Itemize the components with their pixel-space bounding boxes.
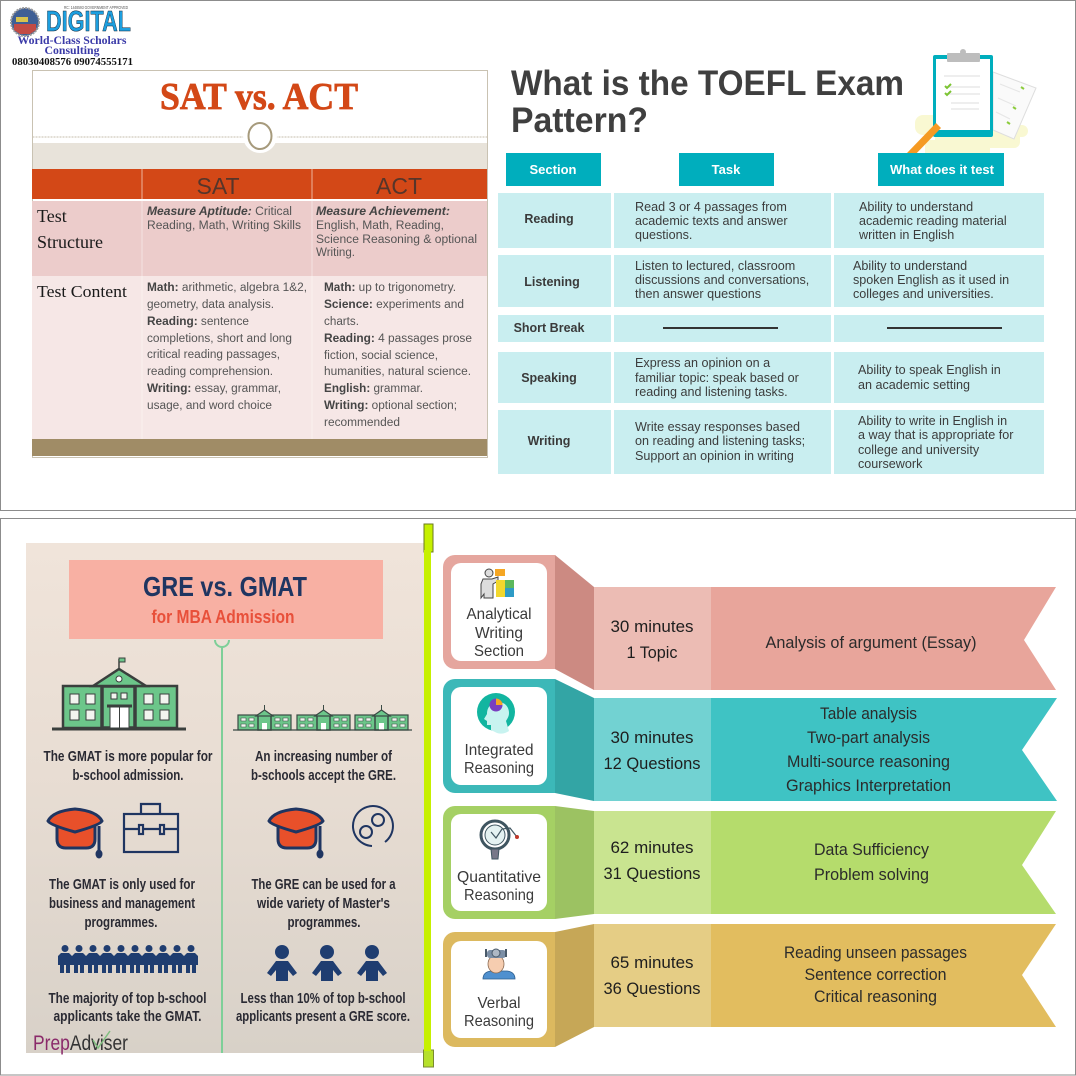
row: Writing: coursework [858,457,923,471]
duration: 62 minutes [610,838,694,857]
text: GRE applicants [236,990,410,1025]
duration [610,617,694,662]
icon: three people [267,945,387,981]
ribbon text: Graphics Interpretation [786,776,951,795]
row: Listening [498,255,1044,307]
row: Listening: then answer questions [635,287,761,301]
panel: GRE vs GMAT [26,543,424,1055]
icon: briefcase [124,804,178,852]
ribbon text: Table analysis [820,704,917,723]
row: Reading: questions. [635,228,692,242]
row: Speaking: an academic setting [858,378,970,392]
ribbon text [814,840,929,884]
icon: infinity circle [353,806,393,846]
row: test structure: Measure Aptitude: Critical [147,206,292,218]
text: GMAT popularity: The GMAT is more popular for [44,748,213,765]
logo: PrepAdviser: PrepAdviser [33,1032,128,1055]
row: Short Break: Short Break [514,321,584,335]
duration: 1 Topic [626,643,678,662]
row: test content: English: grammar. [324,383,423,395]
row: Speaking: Ability to speak English in [858,363,1001,377]
beige band [33,143,487,169]
card label: Verbal [478,995,520,1012]
row: Listening: discussions and conversations, [635,273,809,287]
row: Reading: Read 3 or 4 passages from [635,200,787,214]
row: Writing: on reading and listening tasks; [635,434,805,448]
row: test content: critical reading passages, [147,349,280,361]
ribbon text [784,943,967,1006]
duration: 65 minutes [610,953,694,972]
frame: bottom panel [0,518,1076,1075]
icon: person with puzzle [481,569,514,598]
icon: magnifier with chart [481,821,519,859]
logo: Digital World-Class Scholars Consulting: World-Class Scholars [18,33,127,47]
row: Listening: Listening [524,275,580,289]
duration [604,838,700,883]
text: GRE applicants: Less than 10% of top b-school [240,990,406,1007]
panel: Integrated Reasoning [443,679,1057,801]
heading box: GRE vs. GMAT [143,571,307,602]
card label: Quantitative [457,869,541,886]
icon: large school [52,658,186,729]
row: Listening: Ability to understand [853,259,967,273]
table header row: ACT [376,173,422,199]
ribbon text: Critical reasoning [814,987,937,1006]
icon: graduation cap left [48,809,102,858]
row: Speaking: familiar topic: speak based or [635,371,799,385]
card label [466,606,532,660]
row: test structure: Science Reasoning & optional [316,234,477,246]
ribbon text: Sentence correction [804,965,946,984]
text: GRE use [252,876,396,931]
icon: ten people [58,945,198,973]
text: GRE popularity: An increasing number of [255,748,393,765]
duration: 30 minutes [610,728,694,747]
row: test content: usage, and word choice [147,400,272,412]
text: GMAT use: business and management [49,895,195,912]
ribbon text [786,704,951,795]
text: GRE popularity: b-schools accept the GRE. [251,767,396,784]
row: test structure: Reading, Math, Writing Skills [147,220,301,232]
card label [457,869,541,904]
footer bar [32,439,487,456]
row: test content: Reading: sentence [147,316,249,328]
icon: graduation cap right [269,809,324,858]
logo: Digital World-Class Scholars Consulting: RC: 1448593 GOVERNMENT APPROVED [64,5,129,10]
text: GRE applicants: applicants present a GRE score. [236,1008,410,1025]
text: GMAT popularity [44,748,213,784]
text: GRE use: programmes. [288,914,360,931]
row: Speaking [498,352,1044,403]
row: test content: Math: up to trigonometry. [324,282,456,294]
title: What is the TOEFL Exam Pattern? [511,64,904,140]
row: test content: recommended [324,417,400,429]
row: Listening: colleges and universities. [853,287,994,301]
text: GMAT use: programmes. [84,914,158,931]
text: GMAT use: The GMAT is only used for [49,876,195,893]
row: Reading: written in English [858,228,954,242]
row: Writing: Support an opinion in writing [635,449,794,463]
ribbon text: Two-part analysis [807,728,930,747]
panel: Analytical Writing Section [443,555,1056,690]
panel: Verbal Reasoning [443,924,1056,1047]
row: test structure: Structure [37,232,103,252]
row: test content: Test Content [37,282,127,301]
panel: SAT vs ACT [32,70,488,458]
row: test content: Writing: essay, grammar, [147,383,281,395]
ribbon text: Problem solving [814,865,929,884]
row: Writing: Ability to write in English in [858,414,1007,428]
row: Reading: academic texts and answer [635,214,788,228]
row: test structure: Test [37,206,67,226]
table header buttons: Section [530,162,577,177]
row: Speaking: reading and listening tasks. [635,385,788,399]
row: Listening: Listen to lectured, classroom [635,259,795,273]
row: test content: Science: experiments and [324,299,464,311]
ribbon text: Reading unseen passages [784,943,967,962]
duration: 36 Questions [604,979,700,998]
row: test content: Math: arithmetic, algebra 1&2, [147,282,307,294]
text: GMAT popularity: b-school admission. [72,767,184,784]
row: Writing [498,410,1044,474]
heading box [69,560,383,639]
text: GRE popularity [251,748,396,784]
card label: Section [474,643,524,660]
row: test content: completions, short and long [147,333,292,345]
heading box: for MBA Admission [152,607,294,627]
row: test content: Reading: 4 passages prose [324,333,472,345]
row: Writing: college and university [858,443,980,457]
row: test structure: English, Math, Reading, [316,220,444,232]
card label: Reasoning [464,887,534,904]
table header buttons: What does it test [890,162,995,177]
center divider line [215,640,229,1053]
icon: three small schools [233,705,412,730]
row: Reading: Ability to understand [859,200,973,214]
ribbon text: Analysis of argument (Essay) [766,633,976,652]
row: test structure: Writing. [316,247,355,259]
row: test content: humanities, natural science. [324,366,471,378]
icon: head with gears [483,949,515,979]
text: GMAT use [49,876,195,931]
text: GMAT applicants: applicants take the GMAT. [54,1008,202,1025]
card label: Reasoning [464,1013,534,1030]
card label: Analytical [466,606,532,623]
text: GMAT applicants [48,990,206,1025]
frame: top panel [0,0,1076,510]
divider: lime bar [424,524,434,1067]
table header row: SAT [196,173,240,199]
row: test content: charts. [324,316,359,328]
duration: 31 Questions [604,864,700,883]
row: Reading [498,193,1044,248]
table header buttons: Task [712,162,741,177]
duration: 12 Questions [604,754,700,773]
ribbon text: Multi-source reasoning [787,752,950,771]
text: GRE use: The GRE can be used for a [252,876,396,893]
panel: Quantitative Reasoning [443,806,1056,919]
row: test content: geometry, data analysis. [147,299,274,311]
row: Speaking: Express an opinion on a [635,356,770,370]
logo: Digital World-Class Scholars Consulting: Consulting [44,43,100,57]
row: test content: reading comprehension. [147,366,273,378]
row: Writing: Write essay responses based [635,420,800,434]
card label: Writing [475,625,523,642]
logo: Digital World-Class Scholars Consulting: DIGITAL [46,6,131,38]
icon: clipboard and pencil [907,49,1036,160]
row: test content: fiction, social science, [324,350,438,362]
text: GMAT applicants: The majority of top b-school [48,990,206,1007]
logo: Digital World-Class Scholars Consulting: 08030408576 09074555171 [12,57,133,68]
row: Short Break [498,315,1044,342]
row: Speaking: Speaking [521,371,577,385]
duration: 30 minutes [610,617,694,636]
duration [604,953,700,998]
title: What is the TOEFL Exam Pattern?: Pattern? [511,101,648,140]
row: test content: Writing: optional section; [324,400,457,412]
panel: TOEFL exam pattern [498,49,1044,474]
duration [604,728,700,773]
row: Writing: a way that is appropriate for [858,428,1013,442]
ribbon text: Data Sufficiency [814,840,929,859]
row: Reading: Reading [524,212,574,226]
icon: head with pie chart [477,693,515,734]
row: test structure [32,201,487,276]
card label [464,742,534,777]
table header buttons [506,153,1004,186]
row: Writing: Writing [528,434,570,448]
row: Reading: academic reading material [859,214,1007,228]
card label [464,995,534,1030]
row: test structure: Measure Achievement: [316,206,450,218]
table header row [32,169,487,199]
ornament circle [243,119,277,153]
title: What is the TOEFL Exam Pattern?: What is the TOEFL Exam [511,64,904,103]
card label: Integrated [464,742,534,759]
row: test content [32,276,487,439]
text: GRE use: wide variety of Master's [256,895,390,912]
row: Listening: spoken English as it used in [853,273,1009,287]
logo: Digital World-Class Scholars Consulting [11,5,133,68]
card label: Reasoning [464,760,534,777]
title: SAT vs. ACT: SAT vs. ACT [160,76,358,118]
